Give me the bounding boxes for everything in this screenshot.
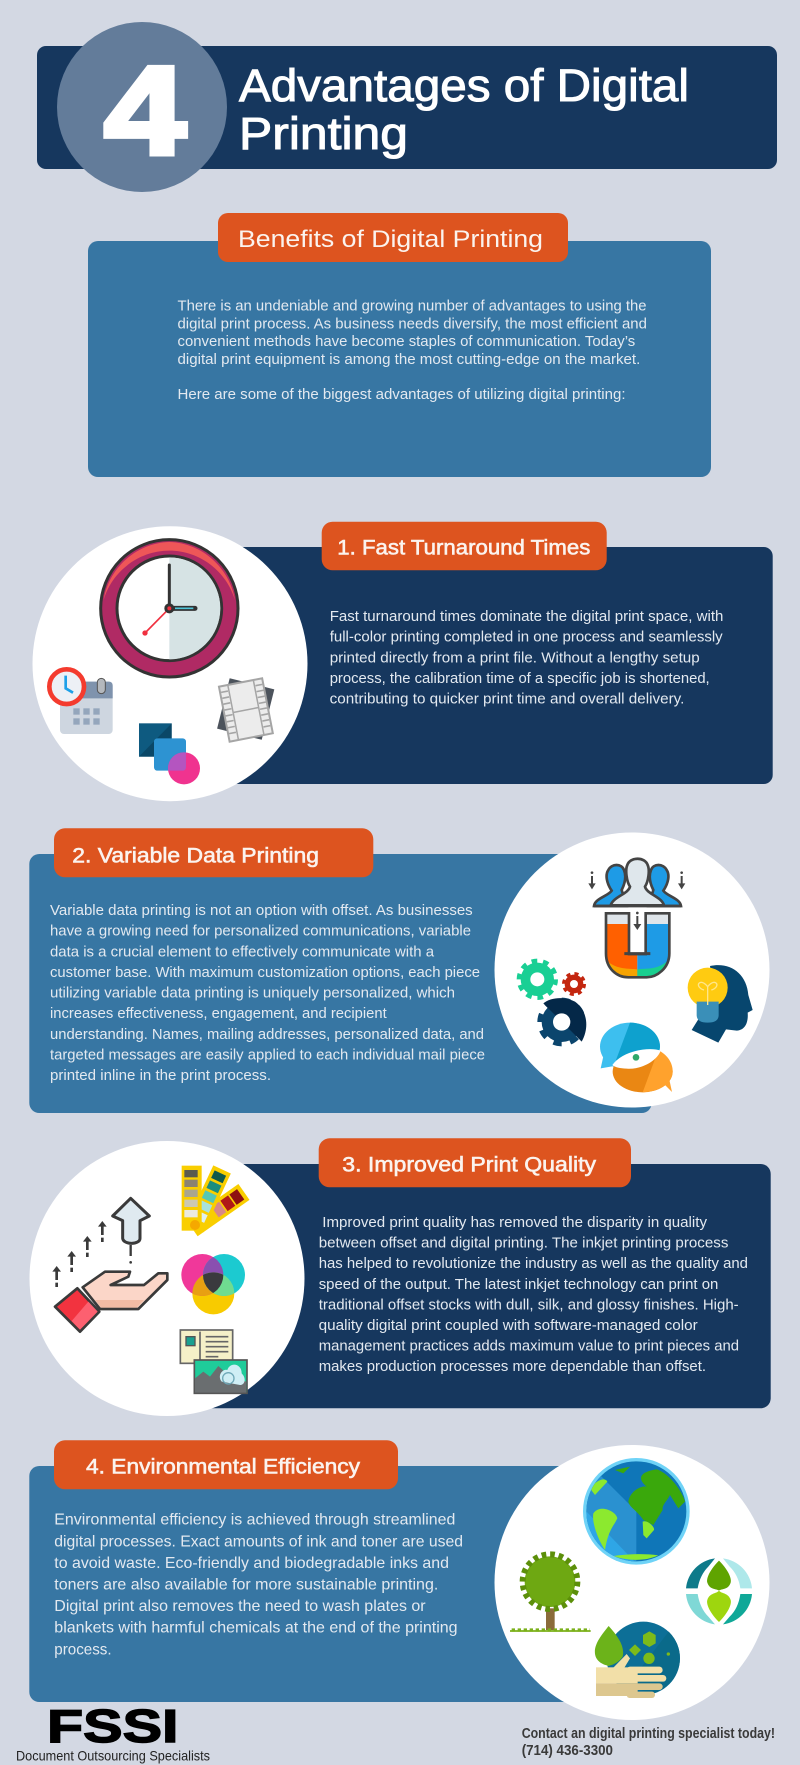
panel: 3 improved print quality	[30, 1138, 771, 1416]
heading tab: 2: 2. Variable Data Printing	[72, 844, 319, 867]
intro text: digital print equipment is among the most cutting-edge on the market.	[178, 351, 640, 368]
body text: 4: to avoid waste. Eco-friendly and biodegradable inks and	[54, 1555, 449, 1572]
title: Advantages of Digital	[239, 60, 689, 111]
icon: hand holding leaf	[595, 1622, 680, 1698]
body text: 4: digital processes. Exact amounts of ink and toner are used	[54, 1533, 463, 1550]
big number 4: 4	[104, 40, 186, 181]
heading tab: 2	[54, 828, 373, 877]
body text: 3: between offset and digital printing. The inkjet printing process	[319, 1235, 729, 1252]
body text: 3	[319, 1214, 748, 1375]
heading tab: 4: 4. Environmental Efficiency	[86, 1455, 361, 1478]
heading tab: benefits	[218, 213, 568, 262]
icon: head with light bulb	[688, 965, 753, 1043]
body text: 3: Improved print quality has removed the disparity in quality	[322, 1214, 707, 1231]
heading tab: benefits: Benefits of Digital Printing	[238, 226, 543, 253]
icon: colour venn diagram	[181, 1254, 245, 1314]
body text: 1: Fast turnaround times dominate the digital print space, with	[330, 608, 723, 625]
logo: FSSI	[16, 1700, 210, 1764]
icon: hand with rising arrows	[52, 1198, 167, 1332]
panel: 4 environmental efficiency	[29, 1440, 770, 1720]
body text: 4: Digital print also removes the need to wash plates or	[54, 1598, 426, 1615]
heading tab: 3	[319, 1138, 631, 1187]
heading tab: 4	[54, 1440, 398, 1489]
body text: 3: has helped to revolutionize the industry as well as the quality and	[319, 1255, 748, 1272]
number circle	[57, 22, 227, 192]
body text: 3: management practices adds maximum value to print pieces and	[319, 1338, 739, 1355]
title: Printing	[239, 108, 408, 159]
body text: 1: process, the calibration time of a specific job is shortened,	[330, 670, 710, 687]
contact call to action	[522, 1726, 775, 1759]
body text: 4: toners are also available for more sustainable printing.	[54, 1576, 438, 1594]
icon: gears	[519, 961, 586, 1044]
body text: 2: utilizing variable data printing is uniquely personalized, which	[50, 984, 455, 1002]
intro text	[178, 298, 647, 403]
icon: printed film sheet	[217, 678, 274, 742]
logo tagline: Document Outsourcing Specialists	[16, 1748, 210, 1764]
body text: 3: traditional offset stocks with dull, silk, and glossy finishes. High-	[319, 1296, 739, 1313]
intro text: Here are some of the biggest advantages of utilizing digital printing:	[178, 386, 626, 403]
body text: 2: customer base. With maximum customization options, each piece	[50, 964, 480, 981]
icon circle: 3	[30, 1141, 304, 1416]
contact call to action: (714) 436-3300	[522, 1743, 613, 1759]
heading tab: 3: 3. Improved Print Quality	[342, 1153, 597, 1176]
heading tab: 1	[322, 522, 607, 570]
body text: 2	[50, 902, 485, 1084]
body text: 1: contributing to quicker print time and overall delivery.	[330, 690, 684, 708]
body text: 2: printed inline in the print process.	[50, 1067, 271, 1084]
body text: 4: blankets with harmful chemicals at the end of the printing	[54, 1620, 458, 1637]
body text: 3: speed of the output. The latest inkjet technology can print on	[319, 1276, 718, 1293]
body text: 4: process.	[54, 1641, 112, 1658]
icon circle: 1	[32, 526, 308, 801]
icon: people and magnet	[588, 859, 685, 980]
icon: speech bubbles	[600, 1023, 673, 1092]
icon: calendar and alarm clock	[49, 669, 113, 734]
panel: 2 variable data printing	[29, 828, 770, 1113]
logo: FSSI: FSSI	[47, 1700, 178, 1752]
body text: 4: Environmental efficiency is achieved through streamlined	[54, 1512, 455, 1529]
body text: 2: data is a crucial element to effectively communicate with a	[50, 943, 435, 960]
icon: colour swatch fan	[182, 1165, 250, 1236]
icon: wall clock	[101, 540, 238, 677]
body text: 2: increases effectiveness, engagement, and recipient	[50, 1005, 387, 1022]
body text: 2: have a growing need for personalized communications, variable	[50, 923, 471, 940]
body text: 1: full-color printing completed in one process and seamlessly	[330, 629, 723, 646]
body text: 2: understanding. Names, mailing addresses, personalized data, and	[50, 1026, 484, 1043]
body text: 2: Variable data printing is not an option with offset. As businesses	[50, 902, 473, 919]
intro text: convenient methods have become staples of communication. Today’s	[178, 333, 635, 350]
body text: 2: targeted messages are easily applied to each individual mail piece	[50, 1046, 485, 1063]
body text: 3: quality digital print coupled with software-managed color	[319, 1317, 698, 1334]
intro text: digital print process. As business needs diversify, the most efficient and	[178, 315, 647, 332]
body text: 1: printed directly from a print file. Without a lengthy setup	[330, 649, 700, 666]
panel: benefits of digital printing	[88, 213, 711, 477]
heading tab: 1: 1. Fast Turnaround Times	[337, 537, 590, 560]
body text: 1	[330, 608, 723, 708]
title	[239, 60, 689, 159]
icon circle: 2	[494, 832, 770, 1108]
body text: 4	[54, 1512, 463, 1658]
icon: tree	[510, 1554, 591, 1631]
icon: globe	[583, 1458, 690, 1565]
icon: leaves in ring	[686, 1558, 752, 1624]
icon: postcards	[180, 1330, 247, 1393]
body text: 3: makes production processes more dependable than offset.	[319, 1358, 706, 1375]
icon circle: 4	[494, 1445, 770, 1720]
intro text: There is an undeniable and growing number of advantages to using the	[178, 298, 646, 315]
panel: 1 fast turnaround times	[32, 522, 773, 801]
icon: overlapping colour shapes	[139, 723, 200, 784]
header banner	[37, 22, 777, 192]
